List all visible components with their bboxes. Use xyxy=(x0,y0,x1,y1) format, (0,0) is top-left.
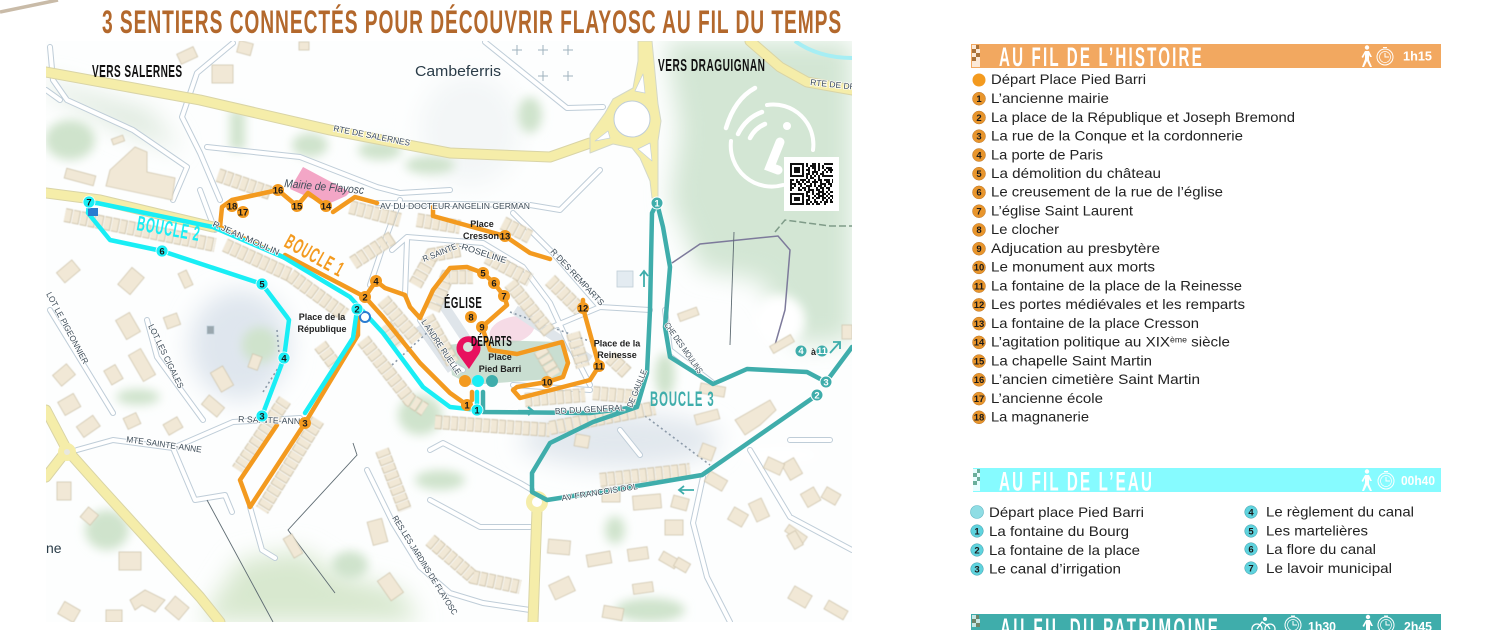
stop list: eau right column: 4 xyxy=(1248,507,1254,518)
header bar: histoire: 1h15 xyxy=(1403,50,1432,64)
road labels: R SAINTE-ANNE xyxy=(238,414,307,426)
stop list: histoire: 12 xyxy=(974,300,984,311)
stop list: histoire: 2 xyxy=(976,113,982,124)
stop list: histoire: 11 xyxy=(974,281,985,292)
road labels: R SAINTE xyxy=(421,241,458,264)
place labels: Place de la xyxy=(299,312,346,322)
stop list: histoire: L’ancienne mairie xyxy=(991,90,1109,106)
orange stop markers: 7 xyxy=(501,292,507,302)
orange stop markers: 14 xyxy=(321,202,332,212)
QR code xyxy=(784,157,839,211)
teal stop markers: 2 xyxy=(814,390,820,402)
place labels: République xyxy=(298,324,346,334)
map vegetation and relief xyxy=(46,41,852,622)
panel: au fil du patrimoine xyxy=(971,612,1441,630)
panel: au fil de l'histoire xyxy=(971,41,1441,425)
road labels: RTE DE DR xyxy=(810,77,856,92)
stop list: histoire: La rue de la Conque et la cordonnerie xyxy=(991,128,1243,144)
stop list: histoire: La chapelle Saint Martin xyxy=(991,352,1152,368)
place labels: Place xyxy=(488,352,512,362)
cemetery crosses xyxy=(512,45,573,81)
orange stop markers: 12 xyxy=(578,304,588,314)
icon: map pin xyxy=(456,336,480,369)
stop list: histoire: L’église Saint Laurent xyxy=(991,202,1133,218)
stop list: histoire: L’ancien cimetière Saint Martin xyxy=(991,371,1200,387)
stop list: eau right column: Les martelières xyxy=(1266,522,1368,538)
orange stop markers: 8 xyxy=(468,312,474,324)
teal stop markers xyxy=(651,197,832,402)
route: boucle 1 orange xyxy=(220,190,599,507)
header bar: eau: 00h40 xyxy=(1401,474,1435,488)
stop list: histoire: 17 xyxy=(974,394,984,405)
header bar: histoire xyxy=(971,41,1441,72)
place name: Cambeferris: Cambeferris xyxy=(415,63,501,80)
orange stop markers: 1 xyxy=(464,400,470,412)
orange stop markers xyxy=(226,184,605,430)
stop list: eau left column: Le canal d’irrigation xyxy=(989,560,1121,576)
orange stop markers: 17 xyxy=(238,208,248,218)
stop list: histoire: L’agitation politique au XIX xyxy=(991,334,1156,350)
orange stop markers: 11 xyxy=(594,362,605,372)
stop list: histoire: Le clocher xyxy=(991,221,1059,237)
legend start marker: histoire: Départ Place Pied Barri xyxy=(991,71,1146,87)
place labels: Reinesse xyxy=(597,350,637,360)
teal stop markers: 1 xyxy=(654,198,660,210)
direction arrows xyxy=(518,271,694,494)
stop list: histoire: La fontaine de la place de la Reinesse xyxy=(991,277,1242,293)
road labels: LOT LE PIGEONNIER xyxy=(44,290,91,366)
stop list: histoire: 7 xyxy=(976,206,982,218)
buildings xyxy=(53,40,852,623)
town centre grey street shade xyxy=(420,300,590,370)
teal 4 to 11 off-map marker xyxy=(796,342,840,357)
stop list: histoire: Le creusement de la rue de l’église xyxy=(991,184,1223,200)
stop list: eau right column: Le règlement du canal xyxy=(1266,504,1414,520)
panel: au fil de l'eau xyxy=(970,466,1441,576)
stop list: eau left column: Départ place Pied Barri xyxy=(989,504,1144,520)
stop list: histoire: ème xyxy=(1170,336,1188,345)
orange stop markers: 15 xyxy=(292,202,303,212)
label: église: ÉGLISE xyxy=(444,293,482,312)
place name: fragment at map edge: ne xyxy=(46,540,62,556)
place labels: Cresson xyxy=(463,231,499,241)
footpaths xyxy=(263,312,710,465)
cyan stop markers: 5 xyxy=(259,280,265,290)
stop list: histoire: 18 xyxy=(974,413,984,424)
cyan stop markers: 3 xyxy=(259,412,265,422)
road labels: R DES REMPARTS xyxy=(549,247,607,308)
road labels: AV FRANCOIS DOL xyxy=(561,481,639,503)
cyan stop markers: 7 xyxy=(86,198,92,208)
orange stop markers: 3 xyxy=(302,418,308,430)
stop list: histoire xyxy=(972,90,1295,425)
label: boucle 3: BOUCLE 3 xyxy=(650,387,714,411)
stop list: histoire: Le monument aux morts xyxy=(991,259,1155,275)
stop list: eau left column xyxy=(970,504,1144,576)
road labels: -ROSELINE xyxy=(457,240,508,265)
teal 4 to 11 off-map marker: 11 xyxy=(817,346,828,357)
pink church square xyxy=(490,316,534,341)
parking block xyxy=(207,271,633,334)
stop list: eau right column: 7 xyxy=(1248,563,1254,574)
stop list: histoire: 15 xyxy=(974,356,985,367)
road labels: Mairie de Flayosc xyxy=(284,178,365,197)
orange stop markers: 13 xyxy=(500,232,510,242)
stop list: histoire: 13 xyxy=(974,319,984,330)
stop list: histoire: 9 xyxy=(976,244,982,255)
stop list: eau right column xyxy=(1245,504,1414,576)
orange stop markers: 9 xyxy=(479,322,485,334)
stop list: histoire: 16 xyxy=(974,375,984,386)
stop list: histoire: La démolition du château xyxy=(991,165,1161,181)
panel: map xyxy=(44,40,856,623)
direction label: vers Draguignan: VERS DRAGUIGNAN xyxy=(658,56,765,76)
road labels: R JEAN MOULIN xyxy=(211,219,281,257)
header bar: eau: AU FIL DE L’EAU xyxy=(999,466,1152,497)
stop list: histoire: L’ancienne école xyxy=(991,390,1103,406)
place labels: Place de la xyxy=(594,338,641,348)
stop list: histoire: 3 xyxy=(976,132,982,142)
boundary lines xyxy=(207,220,852,622)
stop list: histoire: Adjucation au presbytère xyxy=(991,240,1160,256)
orange stop markers: 16 xyxy=(273,186,283,196)
stop list: eau left column: 3 xyxy=(974,564,980,575)
road labels: DE GAULLE xyxy=(625,368,649,409)
stop list: histoire: 4 xyxy=(976,150,982,161)
cyan stop markers: 6 xyxy=(159,246,165,258)
pink town hall block xyxy=(290,167,350,205)
road labels xyxy=(44,77,856,617)
title: 3 SENTIERS CONNECTÉS POUR DÉCOUVRIR FLAYOSC AU FIL DU TEMPS xyxy=(102,4,841,40)
main yellow roads xyxy=(46,41,852,622)
road labels: LOT LES CIGALES xyxy=(146,322,186,390)
stop list: histoire: La magnanerie xyxy=(991,409,1089,425)
road labels: BD DU GENERAL xyxy=(555,402,625,416)
orange stop markers: 10 xyxy=(542,378,552,388)
route: boucle 3 teal xyxy=(483,203,852,500)
label: boucle 1: BOUCLE 1 xyxy=(281,230,348,281)
road labels: RES LES JARDINS DE FLAYOSC xyxy=(390,514,460,617)
stop list: histoire: 10 xyxy=(974,263,984,274)
stop list: histoire: 14 xyxy=(974,338,985,349)
road labels: L ANDRE RUELLE xyxy=(419,318,464,376)
cyan stop markers: 1 xyxy=(474,406,480,416)
label: boucle 2: BOUCLE 2 xyxy=(135,212,201,246)
blue fountain marks xyxy=(88,208,370,322)
start markers xyxy=(459,375,498,387)
map green patches xyxy=(45,97,820,622)
cyan stop markers: 2 xyxy=(354,304,360,316)
road labels: RTE DE SALERNES xyxy=(333,123,411,148)
stop list: histoire: La porte de Paris xyxy=(991,146,1103,162)
decorative corner stroke xyxy=(0,0,58,12)
town square green xyxy=(448,340,568,385)
road labels: AV DU DOCTEUR ANGELIN GERMAN xyxy=(380,201,530,211)
cyan stop markers: 4 xyxy=(281,354,287,364)
stop list: eau right column: La flore du canal xyxy=(1266,541,1376,557)
minor roads xyxy=(46,42,852,622)
road labels: MTE SAINTE-ANNE xyxy=(126,434,203,455)
stop list: histoire: siècle xyxy=(1187,334,1230,350)
teal 4 to 11 off-map marker: à xyxy=(811,347,817,357)
stop list: eau left column: 1 xyxy=(974,526,980,537)
stop list: eau right column: Le lavoir municipal xyxy=(1266,560,1392,576)
place labels xyxy=(298,219,641,374)
orange stop markers: 5 xyxy=(480,268,486,280)
stop list: eau right column: 5 xyxy=(1248,526,1254,537)
direction label: vers Salernes: VERS SALERNES xyxy=(92,62,182,82)
stop list: histoire: 6 xyxy=(976,188,982,199)
teal 4 to 11 off-map marker: 4 xyxy=(798,346,804,357)
stop list: eau left column: La fontaine du Bourg xyxy=(989,523,1129,539)
stop list: histoire: La fontaine de la place Cresson xyxy=(991,315,1199,331)
stop list: eau left column: 2 xyxy=(974,545,980,556)
teal stop markers: 3 xyxy=(823,378,829,388)
stop list: eau left column: La fontaine de la place xyxy=(989,542,1140,558)
place labels: Place xyxy=(470,219,494,229)
header bar: eau xyxy=(973,466,1441,497)
road labels: CHE DES MOULINS xyxy=(662,320,705,376)
river and stream lines xyxy=(795,41,852,58)
orange stop markers: 6 xyxy=(491,278,497,290)
icon: connected info xyxy=(726,88,813,187)
stop list: histoire: La place de la République et Joseph Bremond xyxy=(991,109,1295,125)
stop list: eau right column: 6 xyxy=(1248,544,1254,555)
orange stop markers: 18 xyxy=(227,202,237,212)
orange stop markers: 2 xyxy=(362,292,368,304)
cyan stop markers xyxy=(83,196,483,422)
stop list: histoire: Les portes médiévales et les remparts xyxy=(991,296,1245,312)
place labels: Pied Barri xyxy=(479,364,521,374)
label: départs: DÉPARTS xyxy=(471,331,512,350)
stop list: histoire: 8 xyxy=(976,225,982,236)
route: boucle 2 cyan xyxy=(88,203,477,416)
stop list: histoire: 1 xyxy=(976,94,982,105)
header bar: histoire: AU FIL DE L’HISTOIRE xyxy=(999,41,1202,72)
orange stop markers: 4 xyxy=(373,276,379,288)
stop list: histoire: 5 xyxy=(976,169,982,180)
